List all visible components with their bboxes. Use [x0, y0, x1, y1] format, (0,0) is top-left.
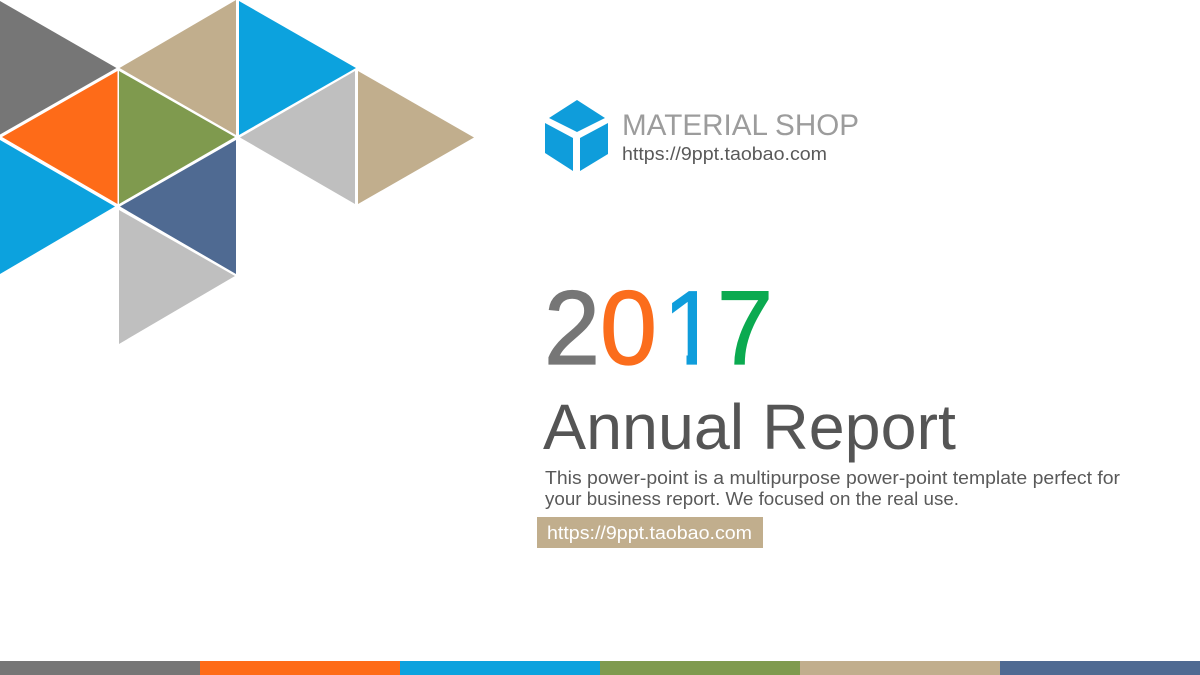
url badge	[537, 517, 763, 548]
title: Annual Report	[543, 391, 956, 463]
year 2017: 7	[717, 270, 773, 387]
triangle: tan right	[358, 71, 474, 204]
description	[545, 467, 1120, 509]
bottom color bar	[0, 661, 1200, 675]
triangle: navy	[120, 140, 236, 274]
year 2017: 1	[663, 270, 719, 387]
triangle: tan top	[120, 0, 236, 135]
year 2017: 2	[544, 270, 600, 387]
triangle: dark gray	[0, 1, 116, 134]
url badge: https://9ppt.taobao.com	[547, 523, 752, 543]
brand url: https://9ppt.taobao.com	[622, 144, 827, 164]
brand name: MATERIAL SHOP	[622, 109, 859, 142]
icon: blue cube logo	[545, 100, 608, 171]
triangle mosaic	[0, 0, 474, 344]
triangle: light blue left	[0, 140, 115, 274]
year 2017: 0	[600, 270, 657, 387]
triangle: green	[119, 71, 235, 204]
triangle: light gray lower	[119, 210, 235, 344]
triangle: blue top	[239, 1, 356, 135]
triangle: light gray right	[240, 71, 355, 204]
description: your business report. We focused on the real use.	[545, 488, 959, 509]
triangle: orange	[2, 71, 118, 204]
year 2017	[548, 290, 769, 366]
description: This power-point is a multipurpose power-point template perfect for	[545, 467, 1120, 488]
